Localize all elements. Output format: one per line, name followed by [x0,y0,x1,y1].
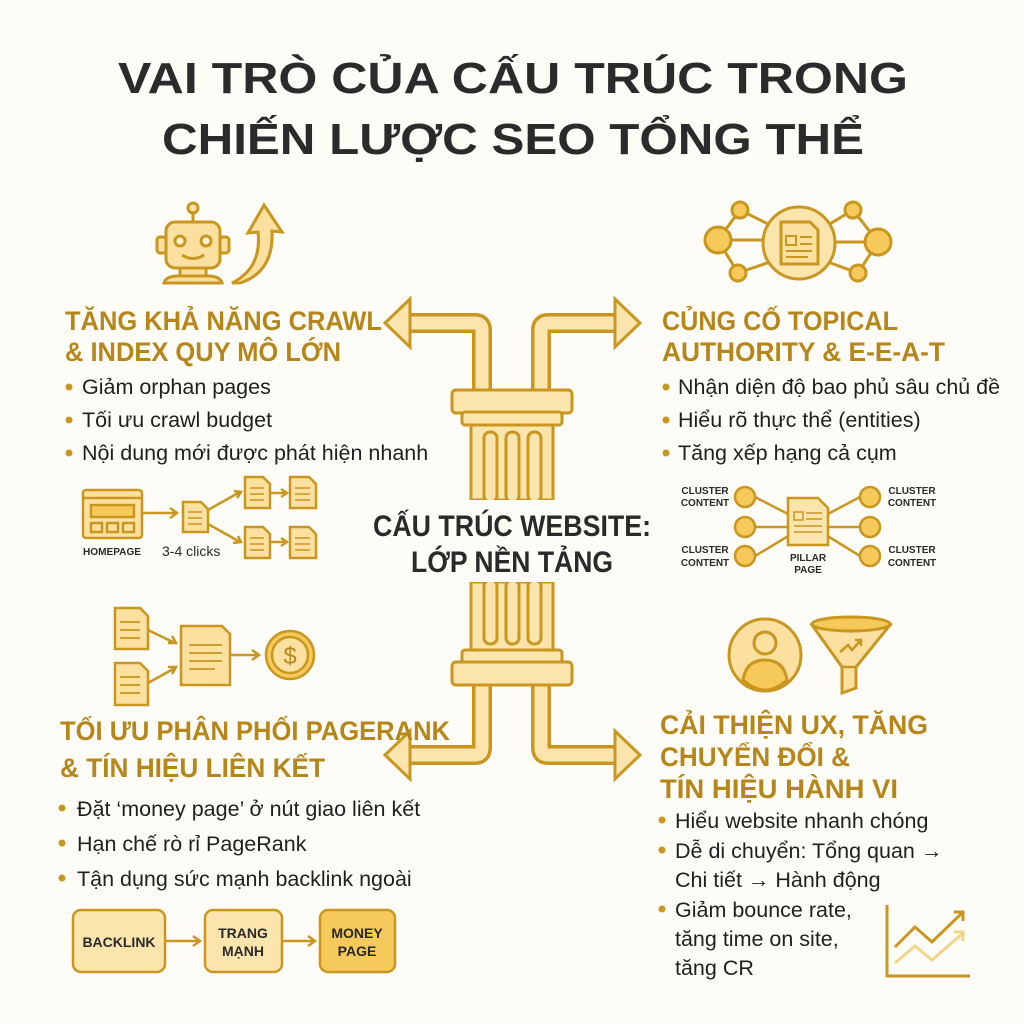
diagram: link flow: PAGE [338,943,376,959]
bullets: tăng time on site, [675,927,839,951]
panel: ux & conversion [658,617,970,980]
diagram: pillar & cluster: CLUSTER [681,486,729,497]
center label [370,500,654,582]
center label: LỚP NỀN TẢNG [411,545,613,579]
bullets: Giảm bounce rate, [675,898,852,922]
icon: docs to money [115,608,314,705]
title: VAI TRÒ CỦA CẤU TRÚC TRONG [118,52,908,103]
diagram: pillar & cluster: CONTENT [888,558,936,569]
bullets: Chi tiết → Hành động [675,868,881,892]
panel: crawl & index: HOMEPAGE [83,547,141,558]
diagram: link flow: BACKLINK [82,934,156,950]
bullets: tăng CR [675,956,754,980]
diagram: pillar & cluster: PILLAR [790,553,827,564]
bullets [662,375,1000,465]
bullets: Tận dụng sức mạnh backlink ngoài [77,867,412,891]
heading [660,708,928,804]
bullets: Tối ưu crawl budget [82,408,272,432]
heading: CẢI THIỆN UX, TĂNG [660,708,928,740]
diagram: pillar & cluster: CLUSTER [888,486,936,497]
panel: crawl & index [65,203,428,559]
pillar [452,390,572,685]
panel: pagerank [58,608,450,972]
chart: growth lines [887,905,970,976]
bullets: Nhận diện độ bao phủ sâu chủ đề [678,375,1000,399]
panel: pagerank: $ [283,643,297,670]
heading: & INDEX QUY MÔ LỚN [65,336,341,367]
diagram: link flow: TRANG [218,925,268,941]
title: CHIẾN LƯỢC SEO TỔNG THỂ [162,113,864,164]
panel: crawl & index: 3-4 clicks [162,543,220,559]
bullets [658,809,942,980]
panel: topical authority [662,202,1000,576]
icon: robot [157,203,282,283]
diagram: link flow: MẠNH [222,943,264,959]
diagram: pillar & cluster: CLUSTER [888,545,936,556]
arrow: bottom-right [541,684,640,779]
icon: funnel [812,617,890,693]
diagram: pillar & cluster: CONTENT [681,498,729,509]
bullets [66,375,428,465]
diagram: link flow: MONEY [331,925,383,941]
heading: TÍN HIỆU HÀNH VI [660,773,898,804]
center label: CẤU TRÚC WEBSITE: [373,509,651,543]
bullets: Hiểu website nhanh chóng [675,809,928,833]
heading: CỦNG CỐ TOPICAL [662,304,898,336]
bullets: Giảm orphan pages [82,375,271,399]
bullets: Đặt ‘money page’ ở nút giao liên kết [77,797,420,821]
arrow: bottom-left [385,684,482,779]
heading [65,304,382,367]
heading: AUTHORITY & E-E-A-T [662,337,945,367]
diagram: link flow [73,910,395,972]
heading: CHUYỂN ĐỔI & [660,741,850,772]
bullets: Hiểu rõ thực thể (entities) [678,408,921,432]
heading [662,304,945,367]
heading [60,714,450,783]
diagram: pillar & cluster: CLUSTER [681,545,729,556]
diagram: pillar & cluster: PAGE [794,565,822,576]
heading: TĂNG KHẢ NĂNG CRAWL [65,304,382,336]
arrow: top-left [385,299,482,392]
diagram: pillar & cluster: CONTENT [681,558,729,569]
icon: user [729,619,801,691]
arrow: top-right [541,299,640,392]
bullets: Hạn chế rò rỉ PageRank [77,832,307,856]
bullets: Dễ di chuyển: Tổng quan → [675,838,942,863]
diagram: pillar & cluster: CONTENT [888,498,936,509]
heading: & TÍN HIỆU LIÊN KẾT [60,752,325,783]
bullets: Tăng xếp hạng cả cụm [678,441,897,465]
heading: TỐI ƯU PHÂN PHỐI PAGERANK [60,714,450,746]
bullets: Nội dung mới được phát hiện nhanh [82,441,428,465]
icon: network [705,202,891,281]
bullets [58,797,420,891]
diagram: crawl depth [83,477,316,558]
title [118,52,908,164]
diagram: pillar & cluster [681,486,936,576]
